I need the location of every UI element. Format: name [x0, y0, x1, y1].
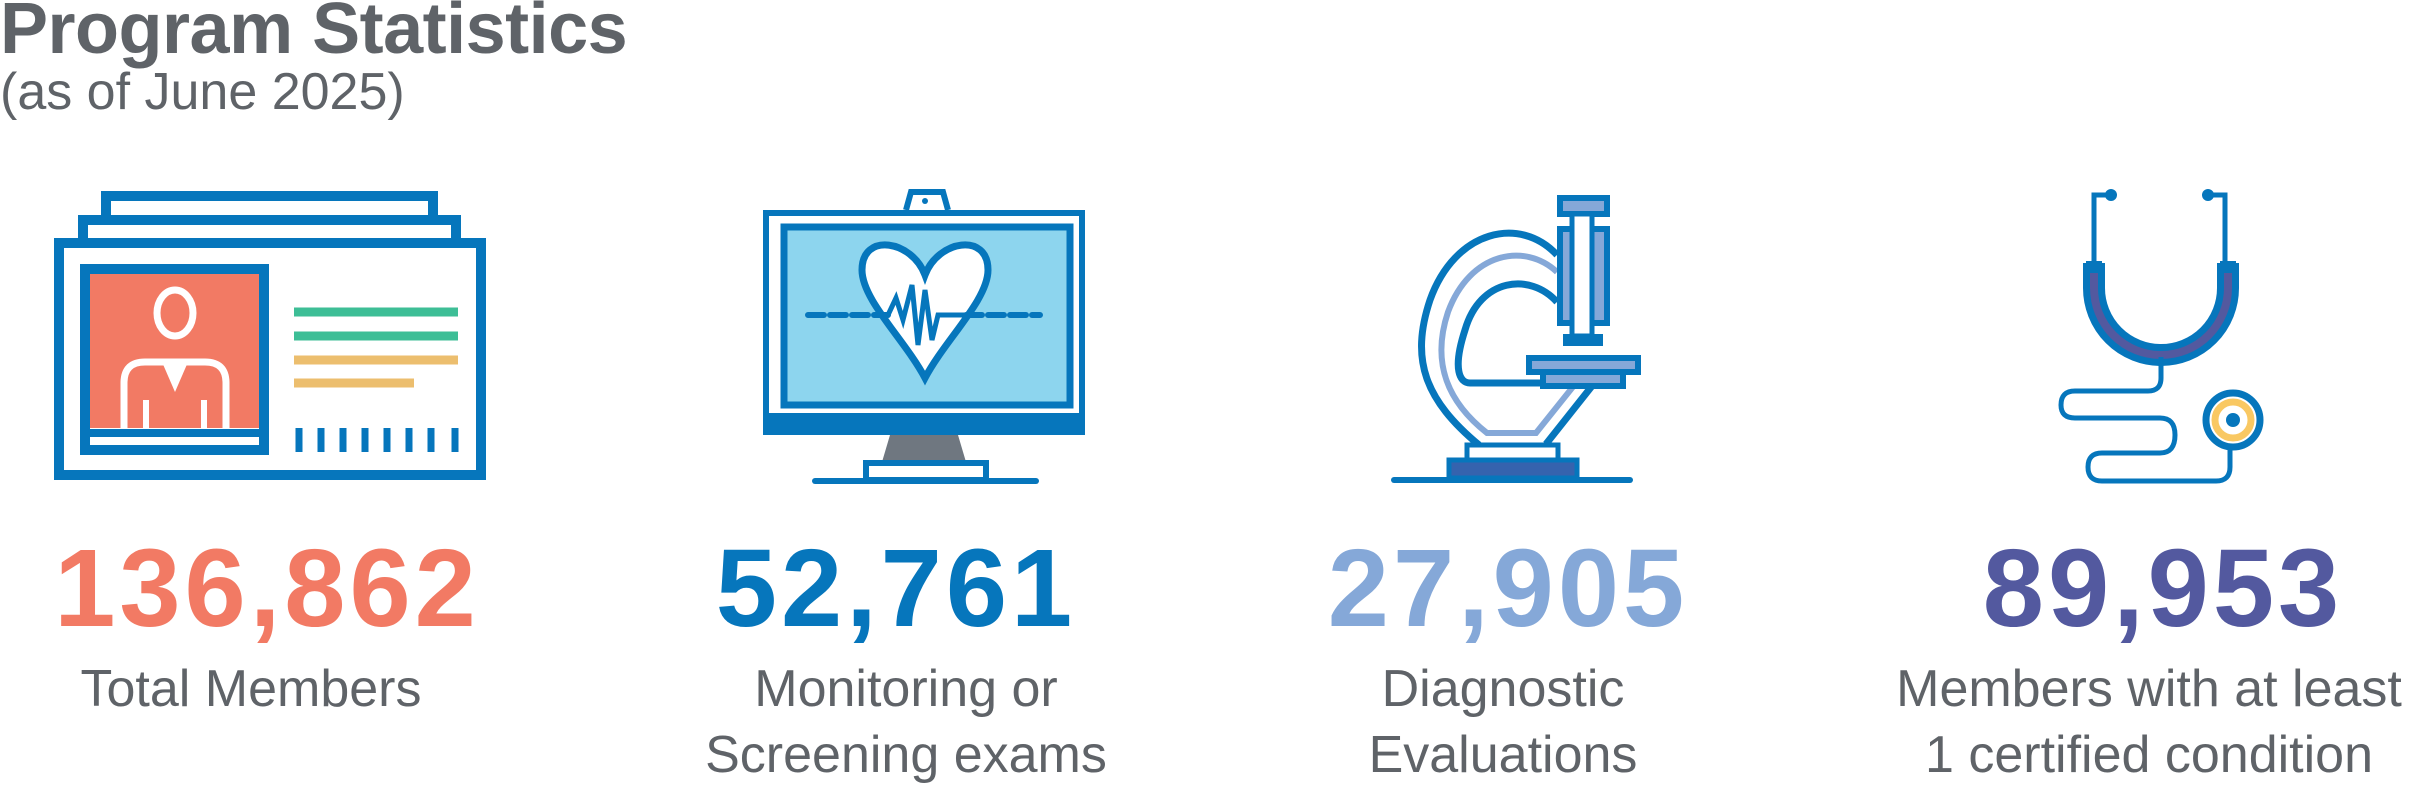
label: diagnostic evaluations [1369, 660, 1637, 784]
label: total members: Total Members [80, 660, 422, 718]
label: diagnostic evaluations: Diagnostic [1382, 660, 1624, 718]
stat: diagnostic evaluations: 27,905 [1328, 527, 1688, 650]
stat: total members: 136,862 [54, 527, 480, 650]
label: monitoring exams: Monitoring or [754, 660, 1058, 718]
icon: member ID card [59, 196, 481, 475]
label: monitoring exams [705, 660, 1107, 784]
label: certified members: Members with at least [1896, 660, 2402, 718]
icon: monitor with heart [763, 192, 1085, 481]
subtitle: (as of June 2025) [0, 63, 405, 121]
icon: stethoscope [2061, 189, 2260, 481]
stat: monitoring exams: 52,761 [716, 527, 1076, 650]
label: certified members [1896, 660, 2402, 784]
label: certified members: 1 certified condition [1925, 726, 2373, 784]
icon: microscope [1394, 198, 1638, 480]
label: diagnostic evaluations: Evaluations [1369, 726, 1637, 784]
label: monitoring exams: Screening exams [705, 726, 1107, 784]
stat: certified members: 89,953 [1983, 527, 2343, 650]
